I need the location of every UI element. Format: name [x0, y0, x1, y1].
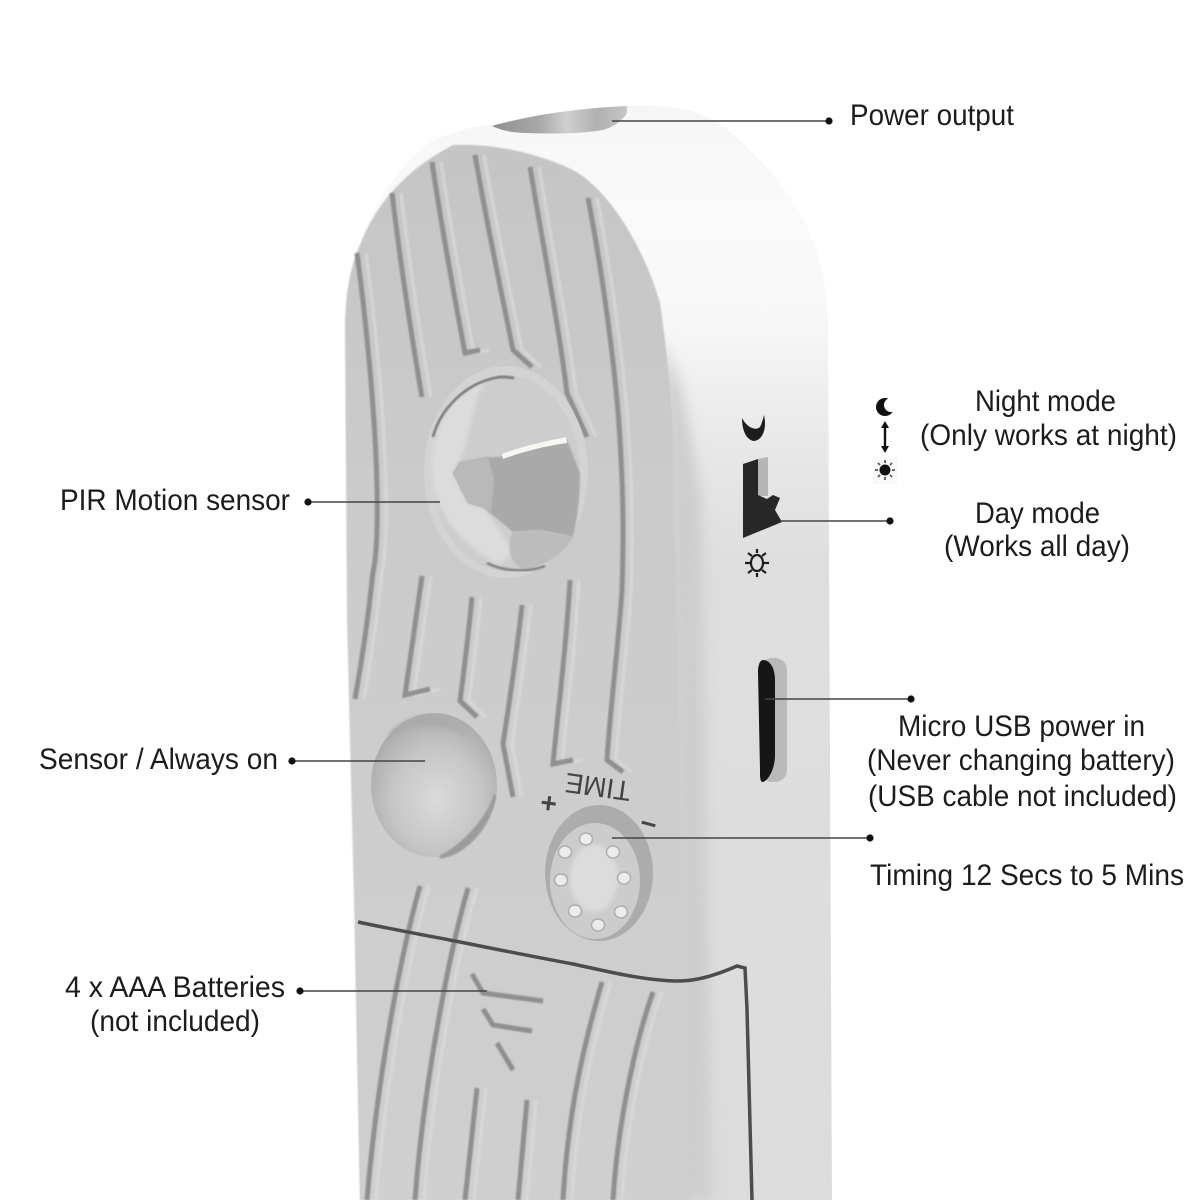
icon: power output slot [492, 106, 627, 134]
panel: device body side [345, 105, 832, 1200]
icon: micro USB port [758, 658, 787, 782]
icon: sun on device [745, 549, 769, 577]
groove highlights [364, 155, 662, 1200]
text: minus mark: − [637, 807, 660, 841]
icon: night mode moon legend [876, 398, 898, 416]
label: night mode: (Only works at night) [920, 419, 1177, 452]
dial face [550, 823, 640, 939]
face grooves [355, 155, 653, 1200]
label: day mode [944, 497, 1130, 563]
label: night mode [920, 385, 1177, 452]
icon: PIR motion sensor lens [424, 366, 588, 578]
label: batteries: (not included) [90, 1005, 260, 1038]
icon: day mode sun legend [873, 457, 897, 484]
leader: always-on sensor [288, 757, 425, 765]
label: day mode: (Works all day) [944, 530, 1130, 563]
icon: moon on device [742, 415, 765, 441]
text: upside-down TIME mark: TIME [563, 767, 633, 807]
timing dial [545, 805, 653, 941]
icon: mode switch [743, 457, 782, 538]
panel: device front face [345, 145, 690, 1200]
leader: mode switch [780, 517, 894, 525]
label: batteries [65, 971, 285, 1038]
label: night mode: Night mode [975, 385, 1116, 418]
label: batteries: 4 x AAA Batteries [65, 971, 285, 1004]
icon: mode arrow legend [881, 421, 889, 453]
label: PIR motion sensor: PIR Motion sensor [60, 484, 290, 517]
icon: battery door arrow [472, 974, 543, 1070]
leader: power output [612, 117, 833, 125]
label: day mode: Day mode [975, 497, 1100, 530]
label: micro USB: (USB cable not included) [868, 780, 1177, 813]
dial ring [545, 805, 653, 941]
leader: micro USB [765, 695, 915, 703]
dial holes [554, 833, 630, 931]
text: plus mark: + [538, 787, 559, 820]
label: micro USB: (Never changing battery) [867, 744, 1175, 777]
leader: PIR sensor [304, 498, 440, 506]
label: power output: Power output [850, 99, 1015, 132]
leader: batteries [296, 987, 487, 995]
battery door outline [358, 922, 752, 1200]
label: sensor always on: Sensor / Always on [39, 743, 278, 776]
label: micro USB: Micro USB power in [898, 710, 1145, 743]
icon: always-on sensor button [371, 713, 497, 857]
label: timing: Timing 12 Secs to 5 Mins [870, 859, 1184, 892]
leader: timing dial [612, 834, 874, 842]
label: micro USB [867, 710, 1177, 813]
